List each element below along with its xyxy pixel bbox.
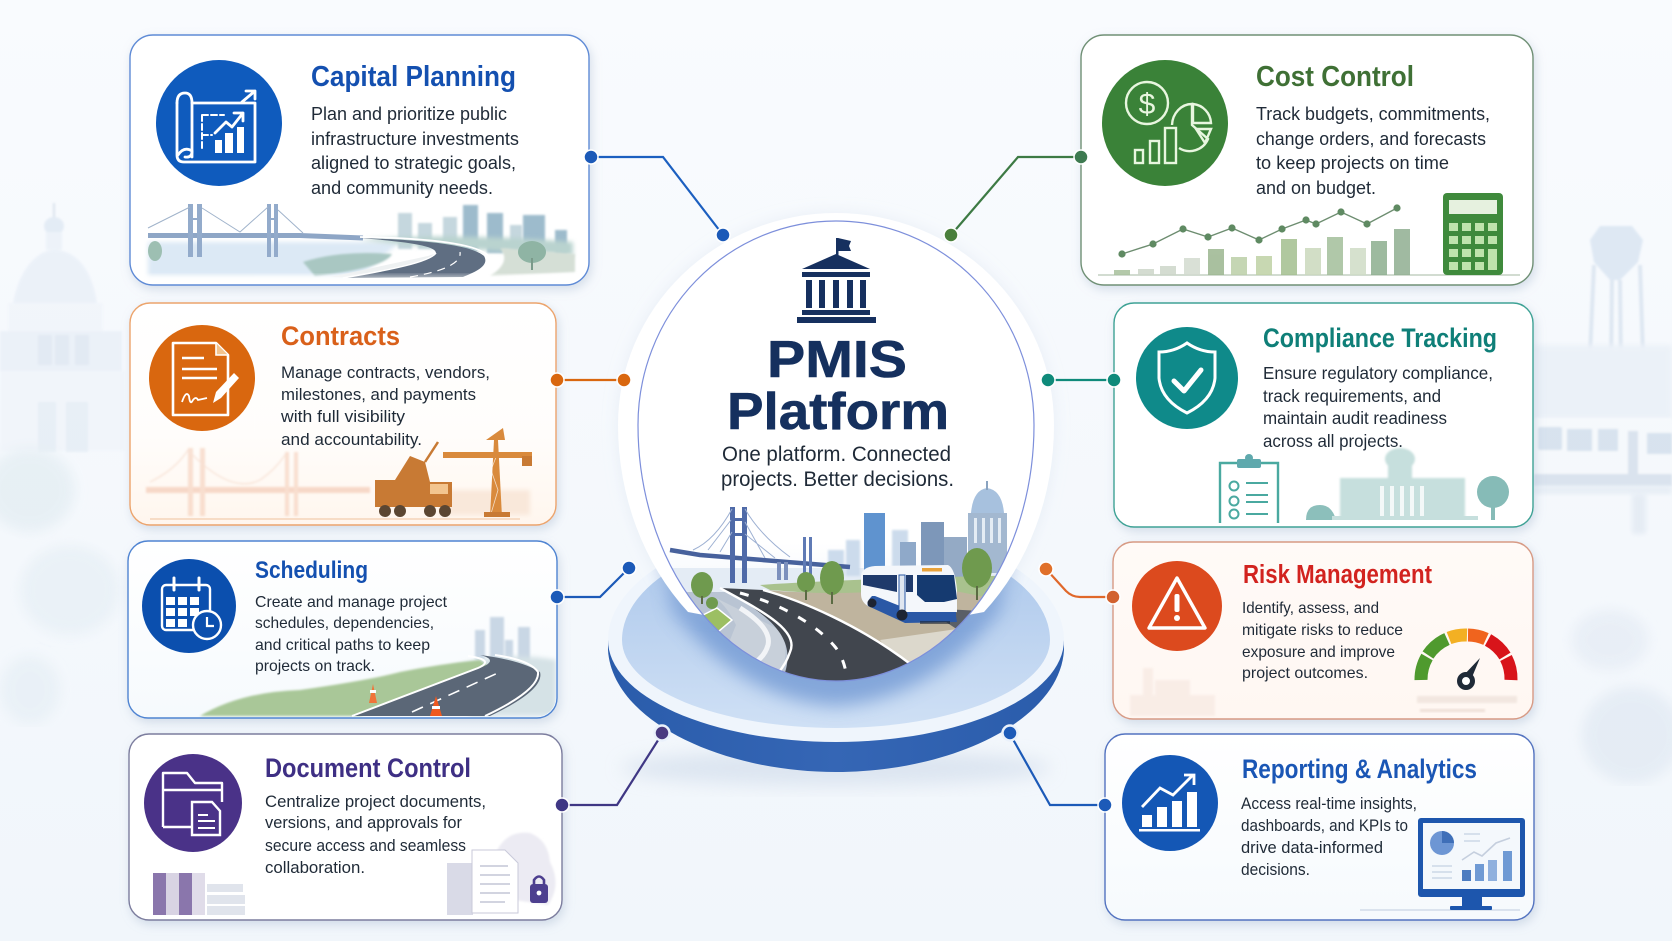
icon: government building [797, 238, 876, 323]
description: aligned to strategic goals, [311, 152, 516, 173]
description [1256, 103, 1490, 198]
description: projects on track. [255, 658, 375, 675]
icon: warning triangle [1132, 561, 1222, 651]
tagline: projects. Better decisions. [721, 468, 954, 491]
illustration: civic building and trees [1306, 448, 1509, 520]
description: secure access and seamless [265, 836, 466, 855]
icon: dollar, pie and bars: $ [1139, 88, 1156, 121]
illustration: dashboard monitor [1360, 818, 1525, 910]
heading: PMIS Platform [727, 331, 949, 441]
description: and critical paths to keep [255, 637, 430, 654]
description: versions, and approvals for [265, 813, 462, 832]
description: and on budget. [1256, 177, 1376, 198]
icon: folder with document [144, 754, 242, 852]
title: Capital Planning [311, 61, 516, 93]
description: decisions. [1241, 861, 1310, 879]
description: and accountability. [281, 430, 422, 449]
description: Track budgets, commitments, [1256, 103, 1490, 124]
description: Access real-time insights, [1241, 795, 1417, 813]
chart: risk gauge [1417, 635, 1517, 712]
icon: rising bar chart [1122, 755, 1218, 851]
description: track requirements, and [1263, 386, 1441, 406]
description [1242, 600, 1403, 682]
illustration: bridge, skyline, road and bus [670, 481, 1007, 680]
tagline [721, 443, 954, 491]
description: Identify, assess, and [1242, 600, 1379, 617]
connector: Reporting & Analytics [1002, 726, 1112, 812]
illustration: trees [691, 548, 992, 609]
title: Document Control [265, 753, 471, 783]
heading: PMIS Platform: Platform [727, 383, 949, 441]
illustration: binders and file stack [153, 873, 245, 915]
title: Cost Control [1256, 61, 1414, 93]
title: Contracts [281, 321, 400, 351]
title: Risk Management [1243, 561, 1432, 589]
description [311, 103, 519, 198]
description [265, 792, 486, 877]
description: exposure and improve [1242, 644, 1395, 661]
description: dashboards, and KPIs to [1241, 817, 1408, 835]
panel: Risk Management [1113, 542, 1533, 719]
connector: Compliance Tracking [1041, 373, 1121, 387]
description: schedules, dependencies, [255, 615, 434, 632]
description [280, 363, 490, 449]
description: collaboration. [265, 858, 365, 877]
connector: Risk Management [1039, 562, 1120, 604]
description: Plan and prioritize public [311, 103, 507, 124]
description [1263, 363, 1493, 451]
description: with full visibility [280, 407, 406, 426]
icon: calendar and clock [142, 559, 236, 653]
illustration: tower crane [443, 428, 532, 517]
panel: Compliance Tracking [1114, 303, 1533, 527]
background: faded water tower, train and trees [1534, 226, 1672, 783]
connector: Capital Planning [584, 150, 730, 242]
description: Manage contracts, vendors, [281, 363, 490, 382]
connector: Document Control [555, 726, 670, 812]
illustration: faded skyline [1130, 668, 1215, 716]
panel: Document Control [129, 734, 562, 920]
illustration: cloud, document and lock [447, 833, 556, 915]
illustration: curving road [720, 588, 913, 690]
description: milestones, and payments [281, 385, 476, 404]
illustration: suspension bridge [670, 507, 850, 583]
description [255, 594, 448, 675]
illustration: dump truck [375, 442, 452, 517]
icon: contract document [149, 325, 255, 431]
circle outline [638, 221, 1034, 681]
illustration: checklist clipboard [1220, 454, 1278, 523]
panel: Contracts [130, 303, 556, 525]
description: to keep projects on time [1256, 152, 1449, 173]
illustration: ground and grass [686, 576, 996, 672]
panel: Cost Control [1081, 35, 1533, 285]
description: across all projects. [1263, 431, 1403, 451]
platform base [608, 568, 1064, 790]
connector: Scheduling [550, 561, 636, 604]
icon: blueprint chart [156, 60, 282, 186]
illustration: bridge, road and skyline [146, 204, 576, 278]
title: Reporting & Analytics [1242, 754, 1477, 784]
description: and community needs. [311, 177, 493, 198]
description: infrastructure investments [311, 128, 519, 149]
panel: Capital Planning [130, 35, 589, 285]
description: change orders, and forecasts [1256, 128, 1486, 149]
description: mitigate risks to reduce [1242, 622, 1403, 639]
description [1241, 795, 1417, 879]
description: maintain audit readiness [1263, 408, 1447, 428]
connector: Contracts [550, 373, 631, 387]
title: Compliance Tracking [1263, 323, 1497, 353]
icon: dollar, pie and bars [1102, 60, 1228, 186]
description: Ensure regulatory compliance, [1263, 363, 1493, 383]
connector: Cost Control [944, 150, 1088, 242]
illustration: highway and cones [200, 617, 556, 716]
illustration: bridge and construction [146, 428, 532, 519]
description: Centralize project documents, [265, 792, 486, 811]
icon: calculator [1443, 193, 1503, 275]
icon: shield check [1136, 327, 1238, 429]
background: faded capitol [0, 203, 125, 724]
panel: Scheduling [128, 541, 557, 718]
central white ring [618, 213, 1054, 615]
title: Scheduling [255, 557, 368, 584]
panel: Reporting & Analytics [1105, 734, 1534, 920]
description: project outcomes. [1242, 665, 1368, 682]
tagline: One platform. Connected [722, 443, 951, 466]
heading: PMIS Platform: PMIS [767, 331, 907, 389]
description: Create and manage project [255, 594, 448, 611]
chart: bars and trend line [1098, 204, 1520, 275]
illustration: city skyline [650, 481, 1020, 592]
illustration: transit bus [861, 565, 957, 624]
description: drive data-informed [1241, 839, 1383, 857]
central circle [638, 221, 1040, 700]
